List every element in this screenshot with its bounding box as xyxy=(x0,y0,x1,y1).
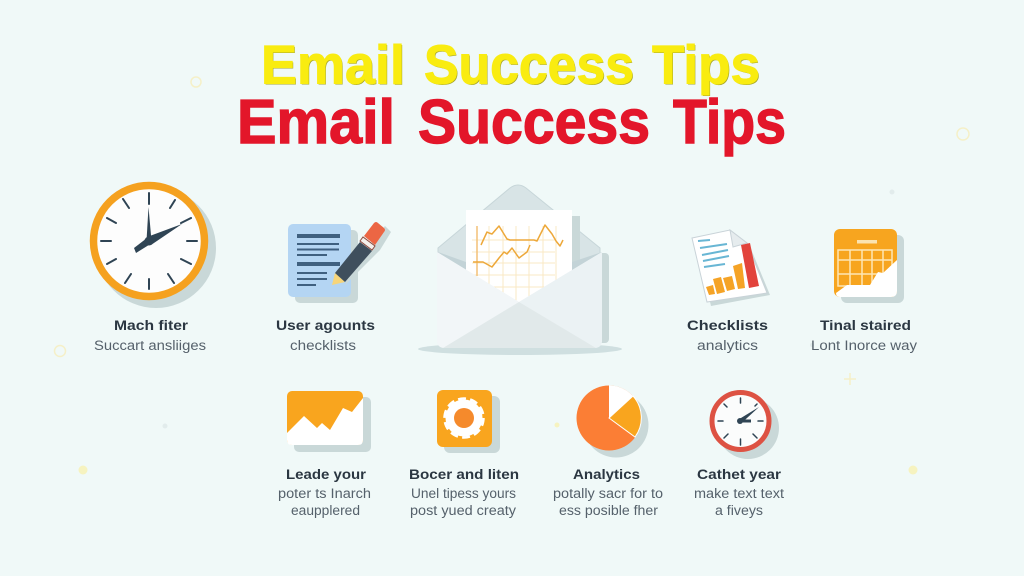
icon: small clock xyxy=(712,392,779,459)
label: Tinal staired: Lont Inorce way xyxy=(811,338,917,353)
label: User agounts xyxy=(276,317,375,353)
title line: yellow xyxy=(261,34,761,96)
title line: red: Tips xyxy=(673,88,786,157)
label: Cathet year xyxy=(694,466,784,518)
label: Leade your: eaupplered xyxy=(291,503,360,518)
icon: large clock xyxy=(94,186,216,308)
title line: yellow: Success xyxy=(424,34,634,96)
title xyxy=(237,34,786,157)
label: Mach fiter xyxy=(94,317,206,353)
label: Mach fiter: Mach fiter xyxy=(114,317,189,333)
title line: red xyxy=(237,88,786,157)
label: Cathet year: make text text xyxy=(694,486,784,501)
icon: pie chart xyxy=(576,385,648,458)
label: Leade your: poter ts Inarch xyxy=(278,486,371,501)
label: Tinal staired: Tinal staired xyxy=(820,317,911,333)
label: Analytics: potally sacr for to xyxy=(553,486,663,501)
icon: open envelope with chart xyxy=(418,185,622,355)
title line: yellow: Success xyxy=(425,34,635,96)
label: Mach fiter: Succart ansliiges xyxy=(94,338,206,353)
label: Analytics xyxy=(553,466,663,518)
label: Bocer and liten xyxy=(409,466,519,518)
paper with line chart xyxy=(466,210,572,306)
envelope back flap xyxy=(438,185,600,270)
envelope body xyxy=(437,252,602,348)
label: User agounts: User agounts xyxy=(276,317,375,333)
label: User agounts: checklists xyxy=(290,338,356,353)
label: Checklists: Checklists xyxy=(687,317,768,333)
icon: report with bars xyxy=(692,230,770,306)
label: Analytics: Analytics xyxy=(573,466,640,482)
title line: yellow: Email xyxy=(261,34,405,96)
label: Checklists: analytics xyxy=(697,338,758,353)
title line: yellow: Email xyxy=(262,34,406,96)
label: Cathet year: Cathet year xyxy=(697,466,782,482)
label: Tinal staired xyxy=(811,317,917,353)
icon: mountain chart card xyxy=(287,391,371,452)
label: Cathet year: a fiveys xyxy=(715,503,763,518)
label: Leade your: Leade your xyxy=(286,466,367,482)
label: Leade your xyxy=(278,466,371,518)
label: Bocer and liten: Bocer and liten xyxy=(409,466,519,482)
title line: red: Email xyxy=(237,88,395,157)
label: Bocer and liten: post yued creaty xyxy=(410,503,516,518)
label: Analytics: ess posible fher xyxy=(559,503,659,518)
title line: yellow: Tips xyxy=(652,34,760,96)
icon: document and pencil xyxy=(288,222,391,303)
label: Checklists xyxy=(687,317,768,353)
icon: gear xyxy=(437,390,500,453)
title line: yellow: Tips xyxy=(653,34,761,96)
title line: red: Success xyxy=(418,88,650,157)
label: Bocer and liten: Unel tipess yours xyxy=(411,486,516,501)
icon: calendar xyxy=(834,229,904,303)
